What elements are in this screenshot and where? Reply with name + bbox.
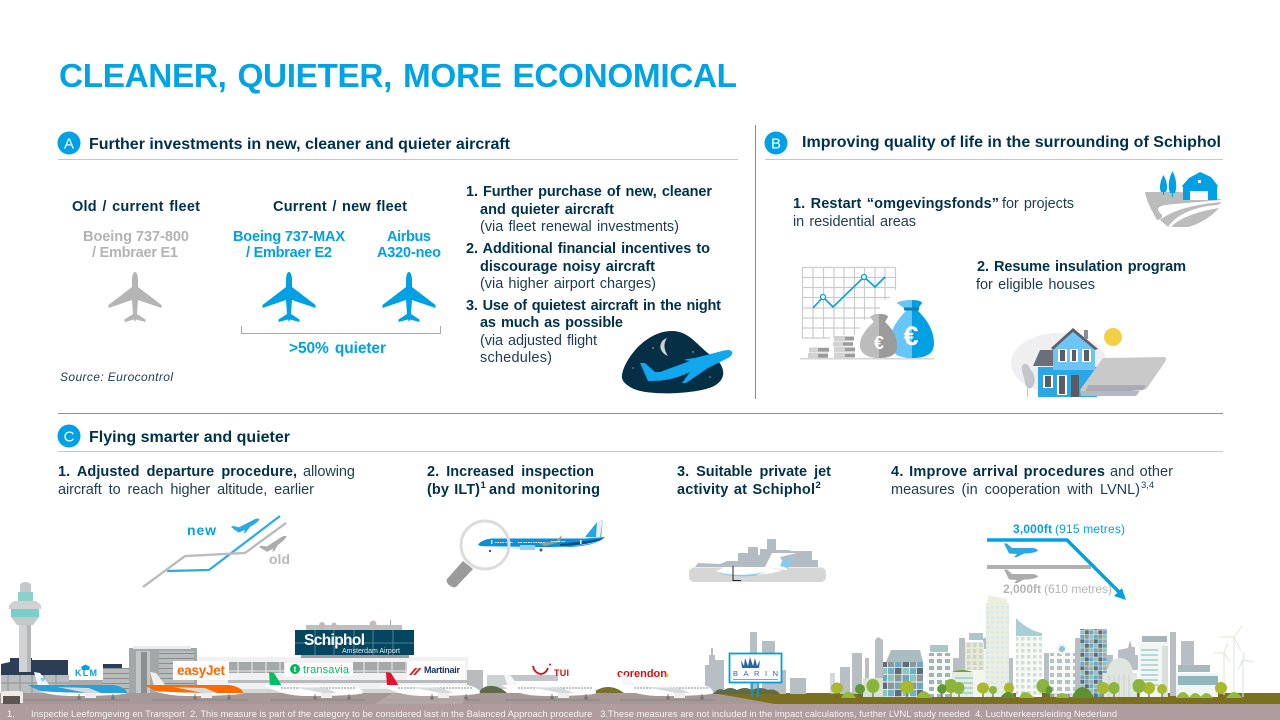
- new fleet column: / Embraer E2: [246, 245, 332, 261]
- panel: A investments: [58, 132, 738, 393]
- icon: arrival paths: 2,000ft: [1003, 582, 1041, 596]
- footnotes bar: Inspectie Leefomgeving en Transport 2. This measure is part of the category to be considered last in the Balanced Approach procedure 3.These measures are not included in the impact calculations, further LVNL study needed 4. Luchtverkeersleiding Nederland: [31, 709, 1117, 719]
- sign: TUI: [533, 664, 569, 678]
- item C1: aircraft to reach higher altitude, earlier: [58, 482, 314, 498]
- heading A: [58, 132, 738, 160]
- measures list: (via adjusted flight: [480, 333, 597, 349]
- measures list: (via higher airport charges): [480, 276, 656, 292]
- plane: KLM: [28, 672, 127, 700]
- bush near barin: [713, 688, 780, 694]
- measures list: 2. Additional financial incentives to: [466, 241, 710, 257]
- plane: easyJet: [144, 672, 243, 700]
- item B1: [793, 196, 1074, 230]
- plane: TUI: [501, 675, 596, 700]
- item C4: 4. Improve arrival procedures: [891, 464, 1105, 480]
- measures list: (via fleet renewal investments): [480, 219, 679, 235]
- item C4: [891, 464, 1173, 498]
- icon: private jet: [689, 539, 826, 582]
- item C1: 1. Adjusted departure procedure,: [58, 464, 297, 480]
- sign: transavia: [285, 663, 353, 676]
- city buildings: [863, 595, 1218, 697]
- new fleet column: [233, 199, 441, 357]
- item C4: and other: [1110, 464, 1173, 480]
- sign: BARIN: BARIN: [733, 669, 778, 678]
- measures list: schedules): [480, 350, 552, 366]
- item C3: 2: [816, 480, 821, 491]
- sign: easyJet: easyJet: [177, 663, 226, 678]
- heading A: Further investments in new, cleaner and quieter aircraft: [89, 136, 511, 153]
- wind turbines: [1213, 626, 1253, 697]
- new fleet column: Boeing 737-MAX: [233, 229, 345, 245]
- measures list: 1. Further purchase of new, cleaner: [466, 184, 712, 200]
- new fleet column: Airbus: [387, 229, 431, 245]
- sign: BARIN: [730, 654, 782, 697]
- measures list: 3. Use of quietest aircraft in the night: [466, 298, 721, 314]
- measures list: [466, 184, 721, 366]
- new fleet column: >50% quieter: [289, 340, 386, 357]
- item C3: [677, 464, 831, 498]
- source note: Source: Eurocontrol: [60, 370, 173, 384]
- heading B: [764, 132, 1223, 160]
- sign: KLM: KLM: [75, 668, 97, 678]
- title: CLEANER, QUIETER, MORE ECONOMICAL: [59, 58, 737, 95]
- icon: arrival paths: 3,000ft: [1013, 522, 1052, 536]
- icon: money chart: €: [903, 321, 919, 351]
- skyline back: [705, 632, 1194, 696]
- item B1: 1. Restart “omgevingsfonds”: [793, 196, 999, 212]
- item C1: [58, 464, 355, 498]
- icon: magnifier and plane: [447, 520, 605, 587]
- heading B: Improving quality of life in the surrounding of Schiphol: [802, 134, 1221, 151]
- new fleet column: A320-neo: [377, 245, 441, 261]
- item C2: (by ILT): [427, 482, 480, 498]
- vehicle: [1, 691, 23, 704]
- icon: arrival paths: (915 metres): [1055, 522, 1125, 536]
- airport illustration: [0, 582, 1280, 704]
- icon: arrival paths: [987, 522, 1126, 600]
- heading B: B: [771, 136, 781, 152]
- divider between A and B: [755, 125, 756, 399]
- icon: insulated house: [1011, 328, 1166, 397]
- sign: Martinair: [407, 661, 465, 680]
- icon: farm fields: [1145, 171, 1222, 227]
- item C2: [427, 464, 600, 498]
- item B1: in residential areas: [793, 214, 916, 230]
- sign: TUI: TUI: [554, 668, 569, 678]
- item C4: 3,4: [1141, 480, 1154, 491]
- icon: night flight: [622, 331, 732, 393]
- ground: [0, 693, 1280, 704]
- heading C: [58, 424, 1223, 452]
- grey terminal tower: [129, 646, 197, 693]
- item C2: and monitoring: [489, 482, 600, 498]
- old fleet column: Boeing 737-800: [83, 229, 189, 245]
- plane: transavia: [264, 672, 363, 700]
- item B2: for eligible houses: [976, 277, 1095, 293]
- heading C: Flying smarter and quieter: [89, 429, 290, 446]
- icon: departure routes: old: [269, 551, 290, 567]
- icon: arrival paths: (610 metres): [1044, 582, 1112, 596]
- sign: transavia: t: [294, 665, 297, 674]
- old fleet column: [72, 199, 200, 322]
- measures list: as much as possible: [480, 315, 623, 331]
- item B2: [976, 259, 1186, 293]
- icon: departure routes: [143, 514, 290, 587]
- back buildings: [1, 658, 68, 675]
- old fleet column: / Embraer E1: [92, 245, 178, 261]
- sign: Schiphol: Schiphol: [304, 632, 365, 649]
- plane: Martinair: [381, 672, 480, 700]
- control tower: [9, 582, 41, 672]
- plane: corendon: [617, 675, 713, 700]
- sign: Schiphol: [295, 620, 414, 658]
- icon: money chart: [800, 267, 934, 360]
- panel: B quality of life: [764, 132, 1223, 397]
- sign: easyJet: [173, 661, 229, 680]
- heading A: A: [64, 136, 74, 152]
- sign: Martinair: Martinair: [424, 665, 460, 675]
- terminal: [197, 657, 624, 693]
- sign: KLM: [69, 663, 103, 680]
- item C1: allowing: [303, 464, 355, 480]
- new fleet column: Current / new fleet: [273, 199, 407, 215]
- footnotes bar: 1.: [7, 709, 15, 719]
- icon: departure routes: new: [187, 522, 216, 538]
- sign: corendon: corendon: [617, 668, 667, 680]
- icon: money chart: €: [874, 333, 884, 353]
- item C4: measures (in cooperation with LVNL): [891, 482, 1140, 498]
- heading C: C: [64, 428, 75, 446]
- item C3: 3. Suitable private jet: [677, 464, 831, 480]
- measures list: and quieter aircraft: [480, 202, 614, 218]
- trees: [831, 679, 1242, 698]
- item C3: activity at Schiphol: [677, 482, 815, 498]
- item C2: 2. Increased inspection: [427, 464, 594, 480]
- old fleet column: Old / current fleet: [72, 199, 200, 215]
- sign: transavia: transavia: [303, 664, 350, 676]
- measures list: discourage noisy aircraft: [480, 259, 655, 275]
- panel: C flying smarter: [58, 413, 1223, 600]
- item B1: for projects: [1002, 196, 1074, 212]
- footnotes bar: [0, 704, 1280, 720]
- item B2: 2. Resume insulation program: [977, 259, 1186, 275]
- sign: Schiphol: Amsterdam Airport: [342, 648, 400, 655]
- item C2: 1: [480, 480, 486, 491]
